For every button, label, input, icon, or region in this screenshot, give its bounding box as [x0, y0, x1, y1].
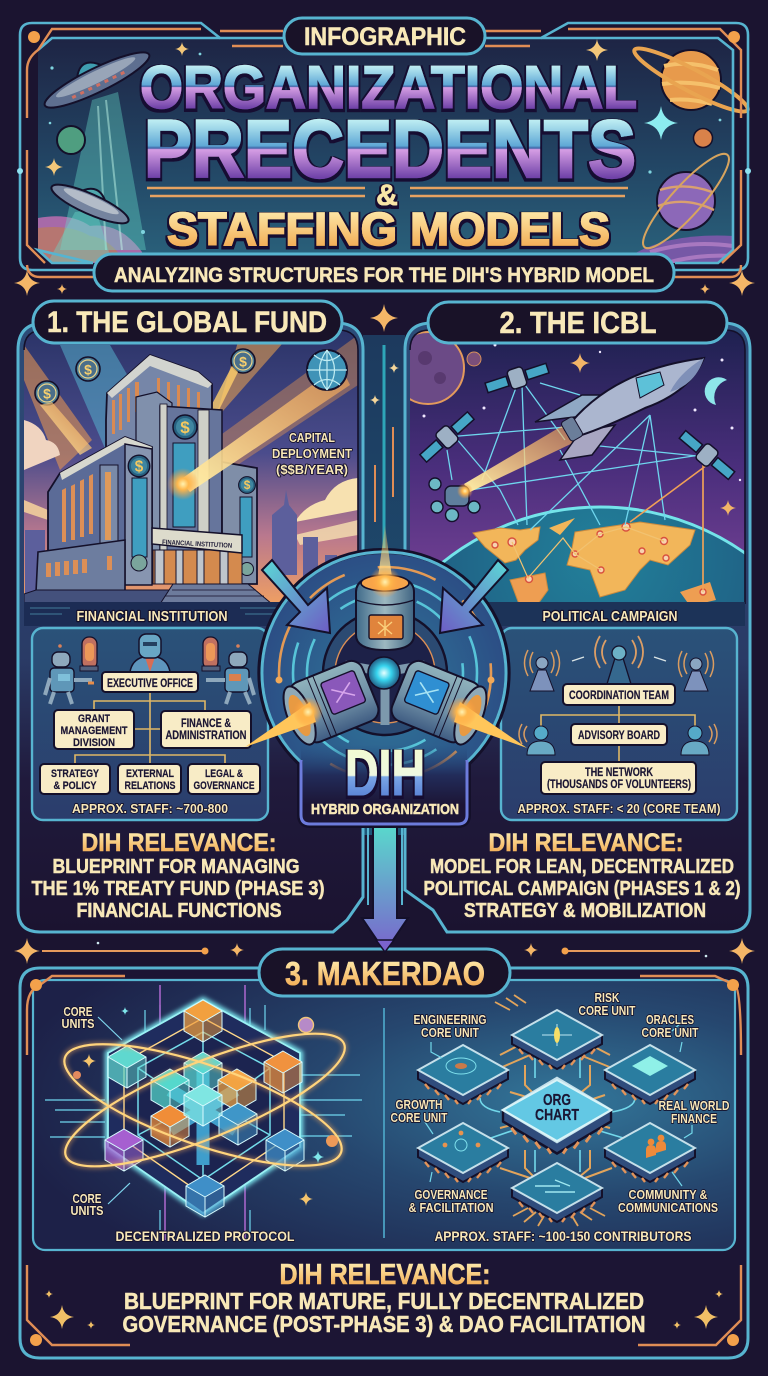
ampersand divider	[147, 179, 628, 212]
icon: large flying saucer	[36, 37, 154, 116]
icon: purple planet	[633, 145, 739, 257]
label: engineering core unit	[414, 1013, 486, 1040]
icon: small orange planet	[694, 128, 712, 148]
beam: left nozzle	[245, 702, 316, 747]
callout: core units lower	[70, 1183, 130, 1218]
staff estimate: APPROX. STAFF: ~700-800	[72, 801, 228, 816]
title line: staffing models: STAFFING MODELS	[167, 203, 610, 255]
icon: left person	[519, 724, 555, 755]
label: risk core unit	[578, 991, 636, 1018]
staff estimate: APPROX. STAFF: < 20 (CORE TEAM)	[518, 801, 720, 816]
box: advisory board	[571, 724, 667, 745]
icon: small flying saucer	[48, 173, 135, 230]
icon: green planet	[57, 126, 85, 154]
network lines	[447, 383, 707, 530]
label: oracles core unit: ORACLES	[646, 1013, 694, 1027]
box: the network: THE NETWORK	[585, 767, 654, 779]
subtitle bar: ANALYZING STRUCTURES FOR THE DIH'S HYBRID MODEL	[114, 264, 654, 287]
caption: decentralized protocol: DECENTRALIZED PROTOCOL	[116, 1228, 295, 1244]
box: external relations: EXTERNAL	[126, 768, 174, 780]
leader lines	[425, 1022, 692, 1186]
chip: org chart: ORG	[543, 1092, 571, 1109]
box: legal and governance: LEGAL &	[205, 768, 243, 780]
central hub: DIH hybrid organization	[245, 525, 527, 825]
title pill: makerdao: 3. MAKERDAO	[285, 955, 485, 992]
icon: left campaigner	[524, 650, 560, 691]
box: advisory board: ADVISORY BOARD	[578, 730, 660, 742]
sign text: FINANCIAL INSTITUTION	[162, 539, 232, 550]
box: external relations	[118, 764, 181, 794]
beam: rocket exhaust	[464, 423, 575, 492]
callout: core units upper: CORE	[64, 1004, 93, 1019]
label: community and communications	[618, 1188, 718, 1215]
chip: org chart	[503, 1078, 611, 1154]
relevance text: global fund: BLUEPRINT FOR MANAGING	[52, 856, 300, 878]
callout: capital deployment: DEPLOYMENT	[272, 447, 352, 461]
chip: engineering core unit	[418, 1045, 508, 1104]
callout: capital deployment: CAPITAL	[289, 431, 335, 445]
label: community and communications: COMMUNITY &	[628, 1188, 708, 1202]
box: external relations: RELATIONS	[124, 780, 176, 792]
building left wing	[47, 436, 153, 550]
badge: infographic	[284, 18, 485, 54]
icon: satellite right	[678, 430, 736, 480]
icon: right person	[681, 724, 717, 755]
callout: capital deployment	[272, 431, 352, 477]
caption band	[410, 602, 745, 626]
box: grant management division: MANAGEMENT	[60, 725, 128, 737]
caption band: POLITICAL CAMPAIGN	[542, 608, 678, 625]
hub rings	[279, 567, 491, 779]
staff estimate: APPROX. STAFF: ~100-150 CONTRIBUTORS	[434, 1228, 692, 1244]
relevance text: global fund: THE 1% TREATY FUND (PHASE 3)	[32, 878, 324, 900]
badge: infographic: INFOGRAPHIC	[304, 23, 466, 51]
label: hybrid organization: HYBRID ORGANIZATION	[311, 801, 459, 818]
interlocking core	[151, 1052, 257, 1165]
label: real world finance: REAL WORLD	[658, 1099, 730, 1113]
building tower	[105, 354, 213, 447]
chip: risk core unit	[512, 1010, 602, 1069]
earth	[442, 506, 744, 602]
nozzle: right	[388, 657, 493, 750]
box: grant management division: DIVISION	[73, 737, 115, 749]
header space illustrations	[38, 39, 733, 265]
box: the network	[541, 762, 696, 794]
label: real world finance	[658, 1099, 730, 1126]
icon: ground drone	[429, 478, 480, 522]
title line: precedents: PRECEDENTS	[144, 104, 636, 195]
relevance text: icbl: STRATEGY & MOBILIZATION	[464, 900, 706, 922]
box: executive office: EXECUTIVE OFFICE	[107, 678, 193, 690]
arrow: from icbl	[440, 560, 508, 633]
box: grant management division	[54, 710, 134, 749]
box: legal and governance	[188, 764, 260, 794]
ampersand divider: &	[376, 179, 398, 212]
icon: right capsule	[202, 637, 220, 671]
title pill: the icbl	[428, 302, 727, 343]
chip: real world finance	[605, 1123, 695, 1182]
callout: core units lower: CORE	[72, 1191, 102, 1206]
box: grant management division: GRANT	[78, 713, 110, 725]
panel: the global fund	[18, 301, 363, 932]
illustration: financial institution building	[24, 330, 358, 604]
org chart: makerdao core unit chips	[390, 991, 730, 1244]
arrow: down to makerdao	[362, 822, 408, 952]
arrow tip over pill	[376, 940, 394, 952]
lower box backdrop	[301, 745, 467, 824]
label: governance and facilitation: & FACILITATION	[408, 1201, 494, 1215]
label: governance and facilitation: GOVERNANCE	[414, 1188, 488, 1202]
callout: core units upper	[62, 1004, 122, 1040]
relevance text: global fund: FINANCIAL FUNCTIONS	[76, 900, 282, 922]
callout: capital deployment: ($$B/YEAR)	[276, 463, 348, 477]
icon: satellite top	[484, 362, 550, 394]
relevance text: global fund: DIH RELEVANCE:	[82, 829, 276, 857]
decorative stars row lower	[14, 938, 755, 964]
icon: right robot	[206, 644, 254, 704]
label: risk core unit: CORE UNIT	[578, 1004, 636, 1018]
section frame accents	[27, 976, 741, 1346]
panel: the icbl	[404, 300, 752, 934]
org chart: global fund	[32, 628, 268, 820]
building base	[36, 540, 125, 592]
chip: governance and facilitation	[512, 1163, 602, 1222]
building right wing	[222, 462, 257, 584]
icon: ringed planet	[629, 40, 753, 120]
title line: organizational: ORGANIZATIONAL	[140, 54, 637, 121]
box: the network: (THOUSANDS OF VOLUNTEERS)	[547, 779, 691, 791]
header frame lines	[17, 23, 751, 277]
relevance text: makerdao: DIH RELEVANCE:	[280, 1259, 490, 1291]
title pill: the icbl: 2. THE ICBL	[500, 305, 656, 340]
title pill: makerdao	[259, 949, 510, 996]
illustration: rocket and earth network	[410, 330, 744, 602]
caption band	[24, 602, 358, 626]
label: governance and facilitation	[408, 1188, 494, 1215]
box: coordination team: COORDINATION TEAM	[569, 690, 669, 702]
subtitle bar	[94, 254, 674, 291]
icon: left robot	[45, 644, 94, 704]
icon: globe	[307, 350, 347, 390]
label: engineering core unit: CORE UNIT	[421, 1026, 479, 1040]
label: engineering core unit: ENGINEERING	[414, 1013, 486, 1027]
box: coordination team	[563, 684, 675, 705]
box: finance and administration	[161, 711, 251, 748]
arrow: from global fund	[262, 560, 330, 633]
frame over image	[24, 330, 358, 604]
callout: core units lower: UNITS	[70, 1203, 104, 1218]
title pill: the global fund: 1. THE GLOBAL FUND	[47, 306, 327, 339]
beam: top nozzle	[377, 525, 393, 585]
icon: executive figure	[130, 634, 170, 672]
relevance text: makerdao: BLUEPRINT FOR MATURE, FULLY DECENTRALIZED	[124, 1288, 644, 1314]
relevance text: global fund	[32, 829, 324, 922]
panel: makerdao	[20, 968, 748, 1358]
label: growth core unit: GROWTH	[396, 1098, 442, 1112]
icon: satellite left	[418, 411, 476, 463]
beam: right nozzle	[454, 702, 527, 748]
box: legal and governance: GOVERNANCE	[194, 780, 254, 792]
icon: cratered planet	[410, 331, 465, 405]
relevance text: icbl: DIH RELEVANCE:	[488, 829, 684, 857]
relevance text: icbl	[424, 829, 740, 922]
nozzle: top	[356, 575, 414, 650]
orbit rings	[52, 1009, 358, 1191]
corner blocks	[105, 1000, 304, 1217]
chip: org chart: CHART	[535, 1107, 579, 1124]
icon: right campaigner	[678, 651, 714, 691]
box: finance and administration: ADMINISTRATION	[166, 730, 246, 742]
center channel between panels	[363, 335, 405, 835]
icon: rocket	[535, 358, 704, 460]
icon: broadcast tower	[572, 636, 666, 684]
callout: core units upper: UNITS	[62, 1016, 95, 1031]
label: growth core unit: CORE UNIT	[390, 1111, 448, 1125]
relevance text: makerdao	[122, 1259, 646, 1337]
icon: left capsule	[80, 637, 98, 671]
header banner	[17, 18, 753, 291]
box: strategy and policy	[40, 764, 110, 794]
chip: growth core unit	[418, 1123, 508, 1182]
illustration: decentralized protocol cube	[45, 985, 362, 1244]
box: strategy and policy: STRATEGY	[51, 768, 100, 780]
box: executive office	[102, 672, 198, 692]
label: community and communications: COMMUNICATIONS	[618, 1201, 718, 1215]
decorative stars row upper	[14, 270, 755, 332]
label: real world finance: FINANCE	[671, 1112, 717, 1126]
box: finance and administration: FINANCE &	[181, 718, 231, 730]
label: growth core unit	[390, 1098, 448, 1125]
org chart: icbl	[501, 628, 737, 820]
label: oracles core unit	[642, 1013, 699, 1040]
chip: oracles core unit	[605, 1045, 695, 1104]
label: DIH: DIH	[345, 736, 425, 809]
beam: capital flow	[184, 378, 350, 492]
relevance text: makerdao: GOVERNANCE (POST-PHASE 3) & DAO FACILITATION	[122, 1311, 646, 1337]
nozzle: left	[277, 657, 382, 750]
caption band: FINANCIAL INSTITUTION	[76, 608, 228, 625]
reactor base	[323, 611, 447, 735]
label: oracles core unit: CORE UNIT	[642, 1026, 699, 1040]
label: risk core unit: RISK	[594, 991, 620, 1005]
box: strategy and policy: & POLICY	[54, 780, 97, 792]
